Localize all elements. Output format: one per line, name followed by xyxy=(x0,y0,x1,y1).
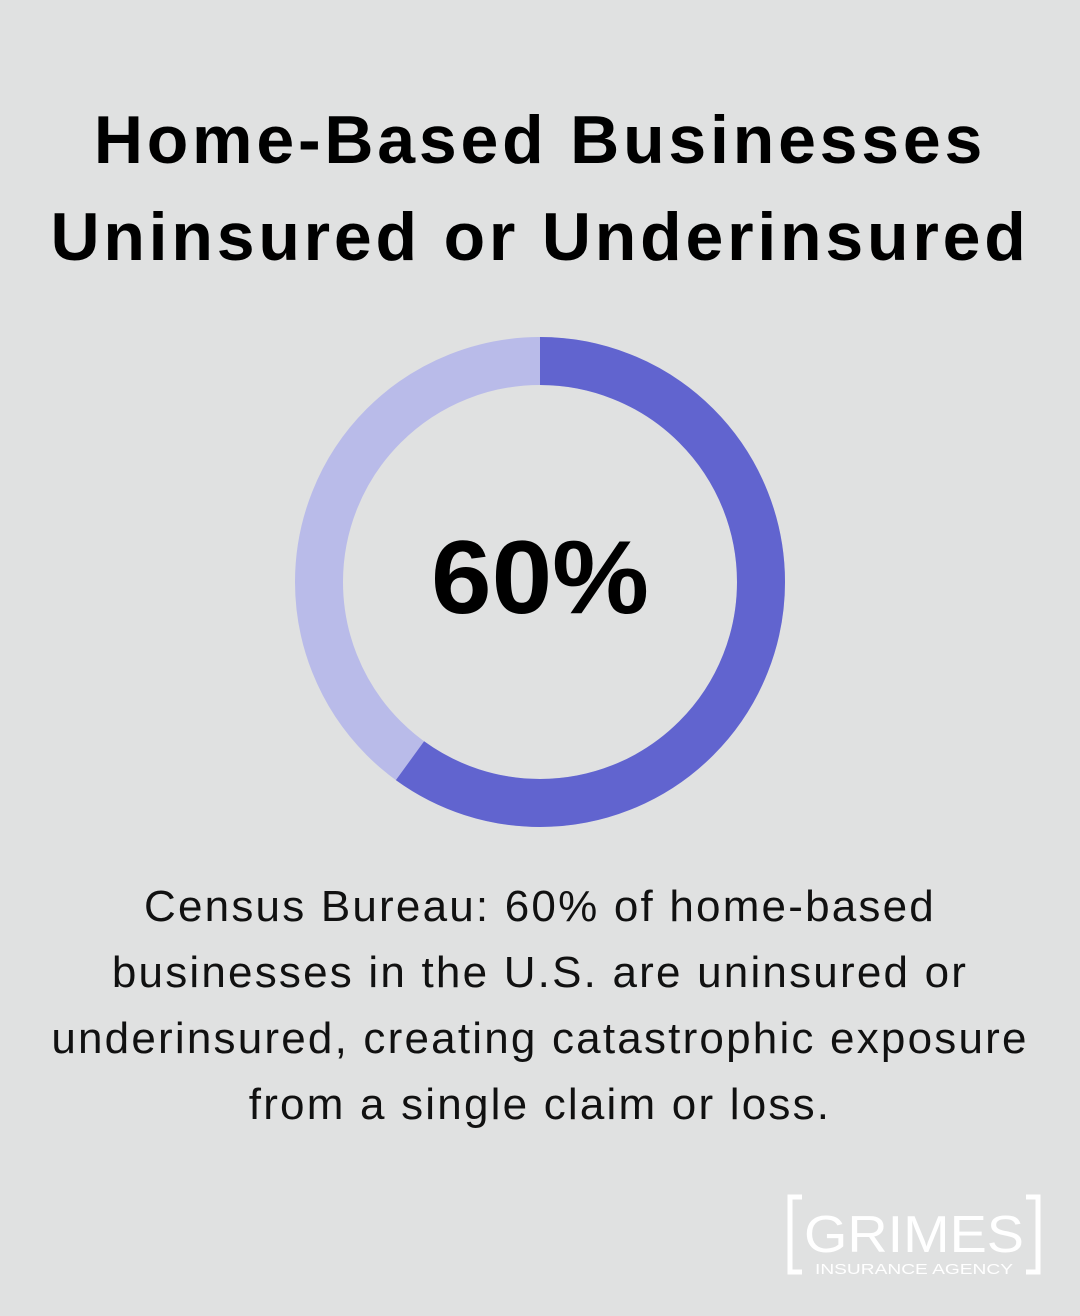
body text xyxy=(51,882,1029,1129)
body text: businesses in the U.S. are uninsured or xyxy=(112,948,968,997)
logo: GRIMES xyxy=(804,1206,1024,1264)
body text: from a single claim or loss. xyxy=(249,1080,831,1129)
body text: underinsured, creating catastrophic exposure xyxy=(51,1014,1029,1063)
title: Home-Based Businesses xyxy=(94,102,986,178)
logo: INSURANCE AGENCY xyxy=(815,1261,1013,1278)
title: Uninsured or Underinsured xyxy=(50,199,1030,275)
donut segment 60% xyxy=(319,361,761,803)
center value: 60% xyxy=(431,520,649,636)
body text: Census Bureau: 60% of home-based xyxy=(144,882,936,931)
donut track (remaining 40%) xyxy=(319,361,761,803)
logo xyxy=(788,1194,1040,1278)
title xyxy=(50,102,1030,275)
